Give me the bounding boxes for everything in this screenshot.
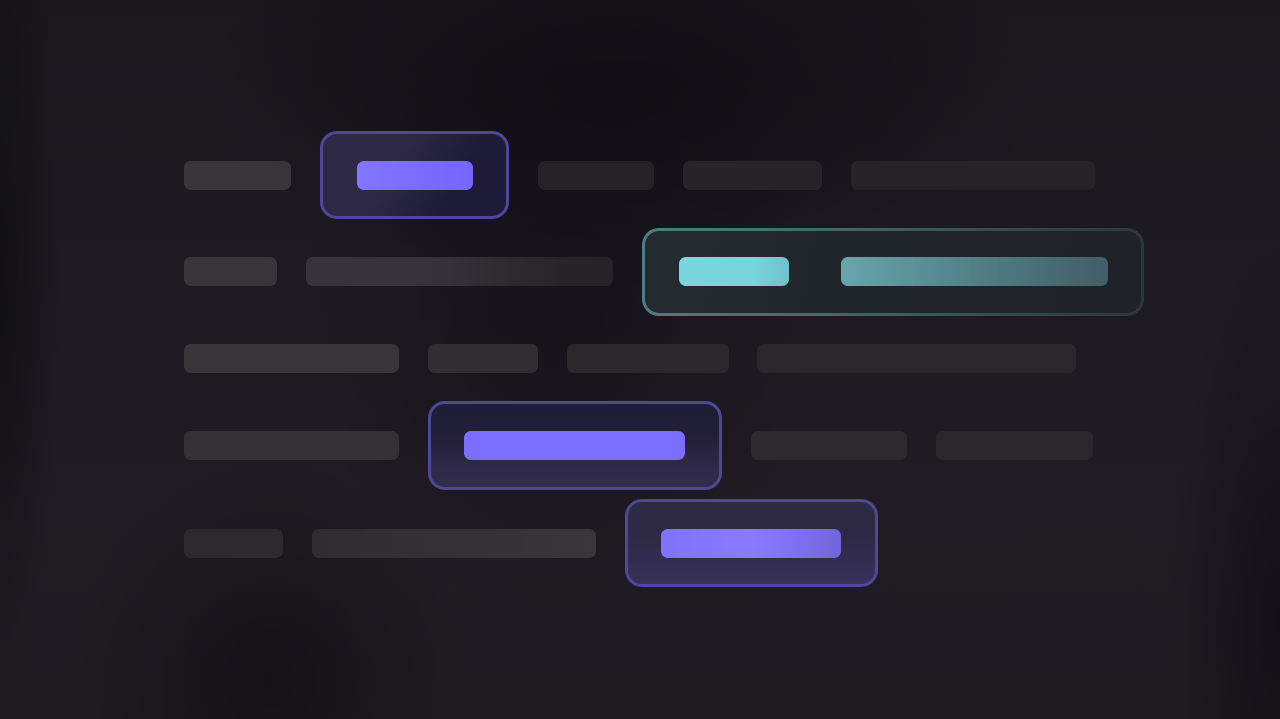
highlight card: purple 2 — [428, 401, 722, 490]
line 1 word 1 — [184, 161, 291, 190]
line 1 word 3 — [538, 161, 654, 190]
line 3 word 2 — [428, 344, 538, 373]
highlighted word: purple 2 — [464, 431, 685, 460]
highlighted word: purple 3 — [661, 529, 841, 558]
line 5 word 1 — [184, 529, 283, 558]
line 3 word 4 — [757, 344, 1076, 373]
highlighted word: purple 1 — [357, 161, 473, 190]
row 5 — [184, 499, 878, 587]
line 2 word 1 — [184, 257, 277, 286]
highlighted word: teal solid — [679, 257, 789, 286]
highlighted word: teal faded — [841, 257, 1108, 286]
line 2 word 2 — [306, 257, 613, 286]
row 4 — [184, 401, 1093, 490]
line 1 word 5 — [851, 161, 1095, 190]
row 1 — [184, 131, 1095, 219]
line 4 word 1 — [184, 431, 399, 460]
line 1 word 4 — [683, 161, 822, 190]
highlight card: purple 3 — [625, 499, 878, 587]
highlight card: teal — [642, 228, 1144, 316]
row 2 — [184, 228, 1144, 316]
line 3 word 3 — [567, 344, 729, 373]
highlight card: purple 1 — [320, 131, 509, 219]
line 4 word 4 — [936, 431, 1093, 460]
line 4 word 3 — [751, 431, 907, 460]
line 3 word 1 — [184, 344, 399, 373]
row 3 — [184, 344, 1076, 373]
line 5 word 2 — [312, 529, 596, 558]
